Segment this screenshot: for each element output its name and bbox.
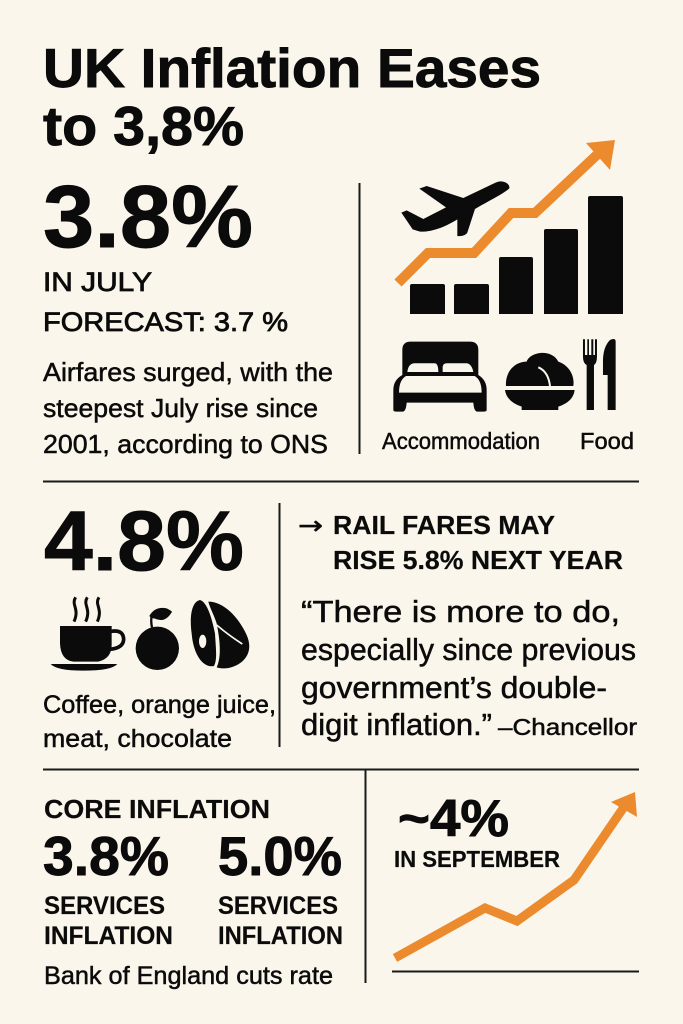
title: to 3,8% — [43, 95, 244, 157]
label: in July and forecast — [43, 267, 288, 337]
big number: 3.8%: 3.8% — [43, 167, 253, 266]
text: airfares note: steepest July rise since — [43, 393, 318, 423]
big number: 4.8%: 4.8% — [44, 494, 244, 588]
label: accommodation and food: Food — [580, 428, 634, 454]
panel: airfares chart and icons — [382, 140, 634, 454]
panel: september outlook — [392, 790, 639, 972]
text: chancellor quote: “There is more to do, — [301, 594, 620, 629]
callout: rail fares: RISE 5.8% NEXT YEAR — [333, 545, 623, 575]
text: bank of england: Bank of England cuts rate — [44, 962, 333, 990]
text: chancellor quote: government’s double- — [301, 670, 607, 705]
title: UK Inflation Eases — [43, 37, 541, 99]
stat: 5.0% services inflation — [218, 825, 343, 950]
label: in July and forecast: IN JULY — [43, 267, 152, 297]
stat: 3.8% services inflation: SERVICES — [44, 892, 165, 920]
icon: airplane — [401, 181, 509, 236]
heading: core inflation: CORE INFLATION — [44, 794, 270, 824]
label: accommodation and food: Accommodation — [382, 428, 540, 454]
stat: 5.0% services inflation: 5.0% — [218, 825, 342, 887]
text: chancellor quote — [301, 594, 637, 742]
label: food items: Coffee, orange juice, — [43, 691, 276, 719]
text: airfares note — [43, 357, 333, 459]
panel: rail fares and quote — [298, 510, 637, 742]
callout: rail fares — [298, 510, 623, 575]
text: chancellor quote: –Chancellor — [498, 714, 637, 740]
stat: 5.0% services inflation: INFLATION — [218, 922, 343, 950]
panel: food prices — [43, 494, 276, 753]
bar chart — [410, 196, 623, 314]
big number: about 4%: ~4% — [398, 790, 509, 848]
icon: fork and knife — [583, 339, 616, 410]
icon: food bowl — [505, 353, 575, 410]
icon: coffee cup — [51, 597, 124, 671]
callout: rail fares: RAIL FARES MAY — [333, 510, 555, 540]
icon: bed — [393, 342, 487, 412]
stat: 3.8% services inflation — [43, 825, 173, 950]
icon: rising orange arrow — [398, 140, 615, 283]
label: food items — [43, 691, 276, 753]
stat: 3.8% services inflation: 3.8% — [43, 825, 169, 887]
title — [43, 37, 541, 157]
label: accommodation and food — [382, 428, 634, 454]
label: in september: IN SEPTEMBER — [394, 846, 560, 872]
panel: core and services inflation — [43, 794, 343, 990]
stat: 5.0% services inflation: SERVICES — [218, 892, 338, 920]
icon: meat — [191, 600, 249, 668]
icon: orange fruit — [136, 608, 179, 670]
panel: headline inflation — [43, 167, 333, 459]
label: in July and forecast: FORECAST: 3.7 % — [43, 307, 288, 337]
text: airfares note: Airfares surged, with the — [43, 357, 333, 387]
text: airfares note: 2001, according to ONS — [43, 429, 328, 459]
text: chancellor quote: especially since previous — [301, 632, 636, 667]
stat: 3.8% services inflation: INFLATION — [44, 922, 173, 950]
line chart: rising arrow — [395, 792, 637, 958]
callout: rail fares: → — [298, 511, 323, 540]
label: food items: meat, chocolate — [43, 725, 232, 753]
text: chancellor quote: digit inflation.” — [301, 707, 492, 742]
